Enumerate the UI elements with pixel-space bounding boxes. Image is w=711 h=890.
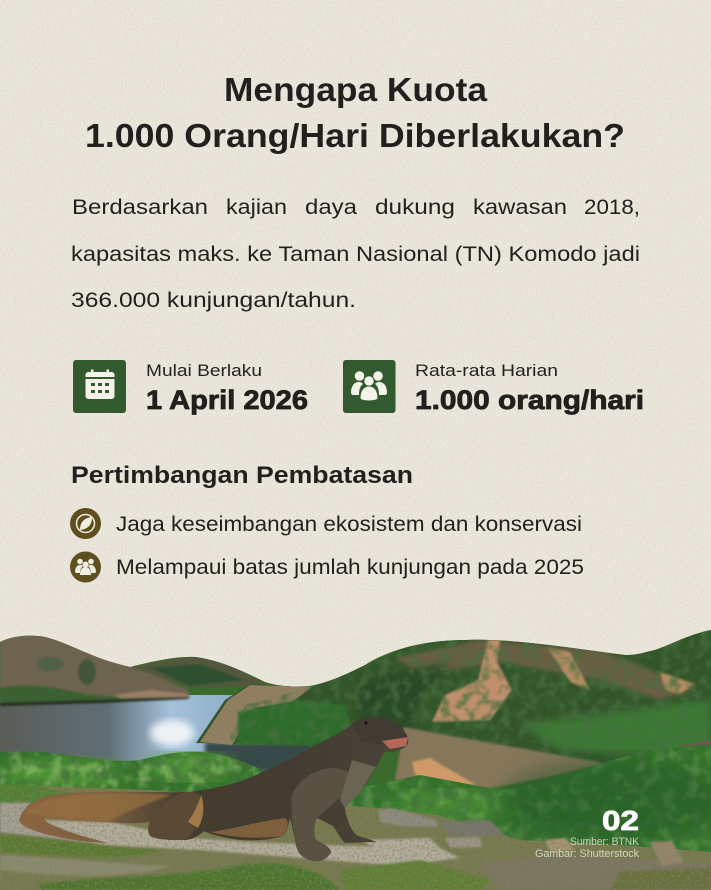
- icon: calendar: [73, 360, 126, 413]
- Komodo dragon: [19, 717, 408, 861]
- page number: 02: [602, 805, 639, 836]
- label: Rata-rata Harian: Rata-rata Harian: [415, 361, 558, 380]
- icon: people: [70, 552, 101, 582]
- intro paragraph: kajian: [226, 195, 287, 219]
- intro paragraph: kapasitas maks. ke Taman Nasional (TN) Komodo jadi: [71, 242, 640, 266]
- intro paragraph: Berdasarkan: [72, 195, 208, 219]
- list item: visitors: [70, 552, 584, 582]
- foliage band: [0, 745, 711, 860]
- value: 1 April 2026: 1 April 2026: [146, 385, 308, 415]
- foreground ground: [0, 780, 711, 890]
- label: Mulai Berlaku: Mulai Berlaku: [146, 361, 262, 380]
- title: Mengapa Kuota: [224, 71, 488, 108]
- stat: start date: [73, 360, 308, 415]
- hills left: [0, 630, 270, 706]
- intro paragraph: 366.000 kunjungan/tahun.: [71, 288, 356, 312]
- value: 1.000 orang/hari: 1.000 orang/hari: [415, 385, 644, 415]
- source credit: Sumber: BTNK: [570, 836, 640, 848]
- title: [85, 71, 625, 154]
- text: Jaga keseimbangan: Jaga keseimbangan ekosistem dan konservasi: [116, 513, 582, 536]
- hill right: [196, 625, 711, 770]
- intro paragraph: 2018,: [584, 195, 640, 219]
- icon: group of people: [343, 360, 396, 413]
- icon: compass leaf: [70, 508, 101, 539]
- intro paragraph: dukung: [375, 195, 455, 219]
- source credit: Gambar: Shutterstock: [535, 848, 639, 860]
- intro paragraph: [71, 195, 640, 312]
- section heading: Pertimbangan Pembatasan: [71, 462, 413, 489]
- source credit: [535, 836, 640, 860]
- scene base: [0, 630, 711, 790]
- mid brown slope: [395, 727, 711, 790]
- stat: daily average: [343, 360, 644, 415]
- title: 1.000 Orang/Hari Diberlakukan?: [85, 117, 625, 154]
- water: [0, 695, 311, 770]
- text: Melampaui batas: Melampaui batas jumlah kunjungan pada 2025: [116, 556, 584, 579]
- intro paragraph: kawasan: [473, 195, 567, 219]
- intro paragraph: daya: [305, 195, 357, 219]
- list item: ecosystem: [70, 508, 582, 539]
- photo: Komodo landscape: [0, 625, 711, 890]
